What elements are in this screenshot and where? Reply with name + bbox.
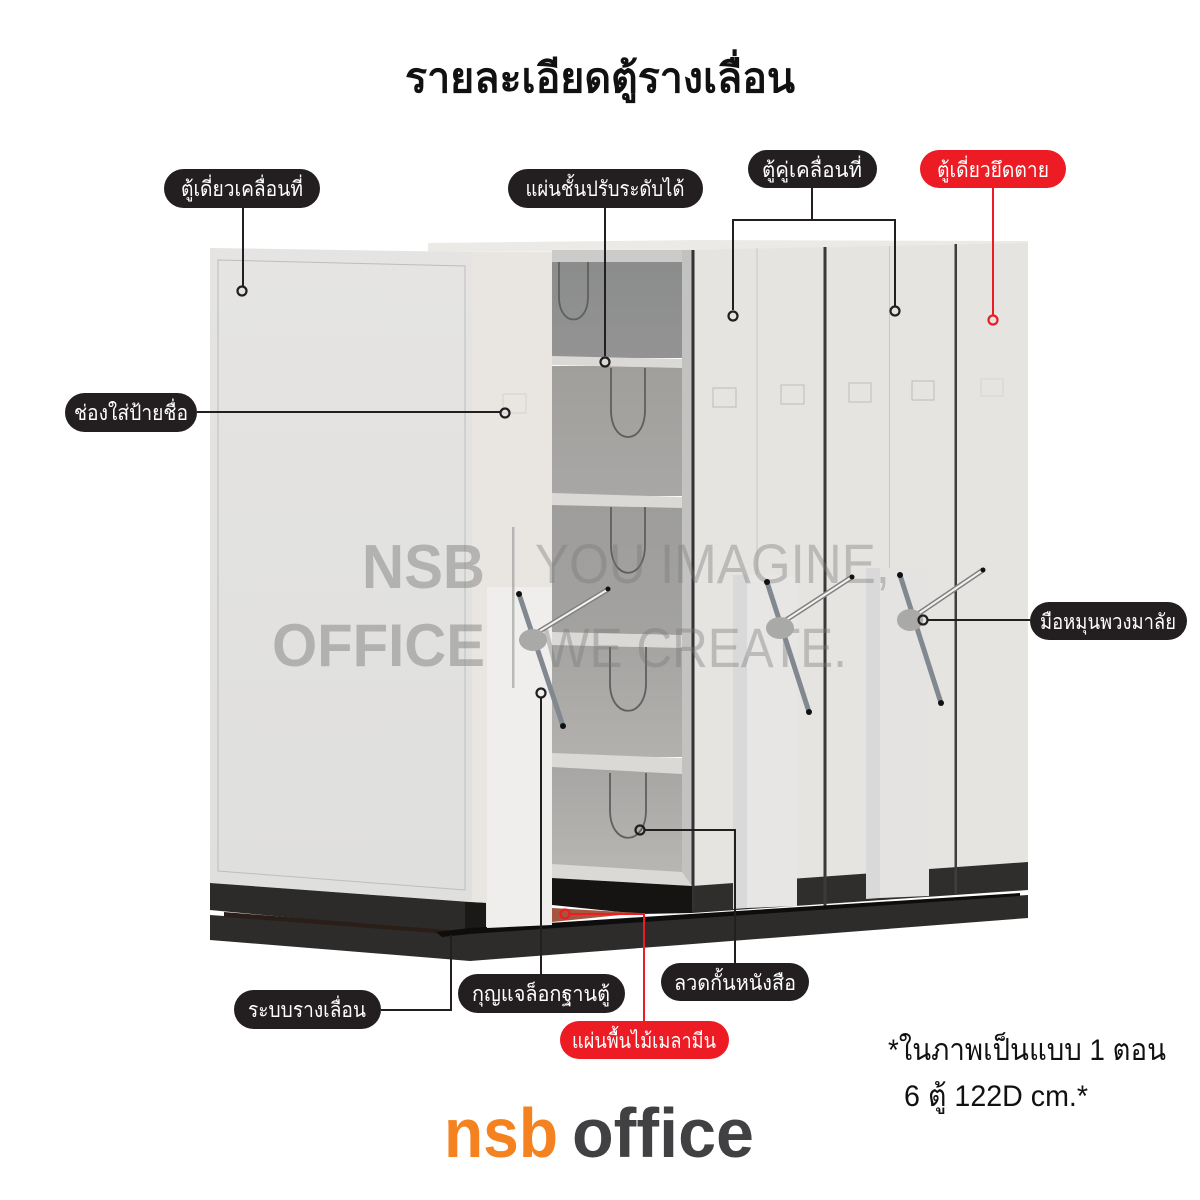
floor rail platform [210, 895, 1028, 961]
open bay interior [552, 250, 694, 922]
title: รายละเอียดตู้รางเลื่อน [405, 49, 795, 104]
logo: office [572, 1094, 754, 1172]
callout: book divider wire: ลวดกั้นหนังสือ [674, 968, 796, 995]
callout: melamine wood floor: แผ่นพื้นไม้เมลามีน [572, 1026, 716, 1053]
book divider wires [559, 262, 646, 838]
callout: double mobile cabinet: ตู้คู่เคลื่อนที่ [762, 155, 862, 183]
callout: base lock [458, 688, 625, 1013]
callout: adjustable shelf [508, 169, 703, 366]
top cap of the rear cabinets [428, 240, 1028, 252]
note [888, 1031, 1166, 1114]
callout: melamine wood floor [560, 910, 729, 1059]
callout: base lock: กุญแจล็อกฐานตู้ [472, 980, 610, 1007]
logo: nsb [444, 1094, 558, 1172]
callout: book divider wire [636, 826, 809, 1001]
mobile shelving cabinet illustration [210, 240, 1028, 961]
plinth blocks [487, 568, 929, 928]
name label holders [713, 379, 1003, 407]
callout: rail system [234, 935, 451, 1029]
shelves [552, 356, 692, 886]
label holder [503, 394, 526, 413]
callout: steering handle: มือหมุนพวงมาลัย [1040, 611, 1176, 635]
callout: fixed single cabinet [920, 150, 1066, 324]
steering handle 1 [516, 586, 610, 729]
rail [224, 912, 448, 934]
callout: name label slot: ช่องใส่ป้ายชื่อ [74, 398, 188, 425]
callout: fixed single cabinet: ตู้เดี่ยวยึดตาย [937, 155, 1049, 183]
callout: single mobile cabinet [164, 169, 320, 296]
note: 6 ตู้ 122D cm.* [904, 1080, 1088, 1114]
callout: steering handle [918, 602, 1187, 640]
right cabinet bank [692, 243, 1028, 913]
watermark: WE CREATE. [543, 616, 847, 679]
callout: adjustable shelf: แผ่นชั้นปรับระดับได้ [526, 174, 684, 201]
logo [444, 1094, 754, 1172]
callout: single mobile cabinet: ตู้เดี่ยวเคลื่อนที่ [181, 174, 303, 202]
steering handle 2 [764, 574, 854, 715]
watermark: NSB [362, 533, 485, 602]
melamine floor [552, 908, 640, 922]
callout: double mobile cabinet [728, 150, 900, 320]
watermark [272, 527, 890, 688]
note: *ในภาพเป็นแบบ 1 ตอน [888, 1031, 1166, 1067]
moved single cabinet [210, 248, 1020, 937]
callout: name label slot [65, 393, 510, 432]
watermark: YOU IMAGINE, [535, 532, 890, 595]
steering handle 3 [897, 568, 986, 706]
watermark: OFFICE [272, 612, 485, 679]
callout: rail system: ระบบรางเลื่อน [248, 995, 366, 1022]
